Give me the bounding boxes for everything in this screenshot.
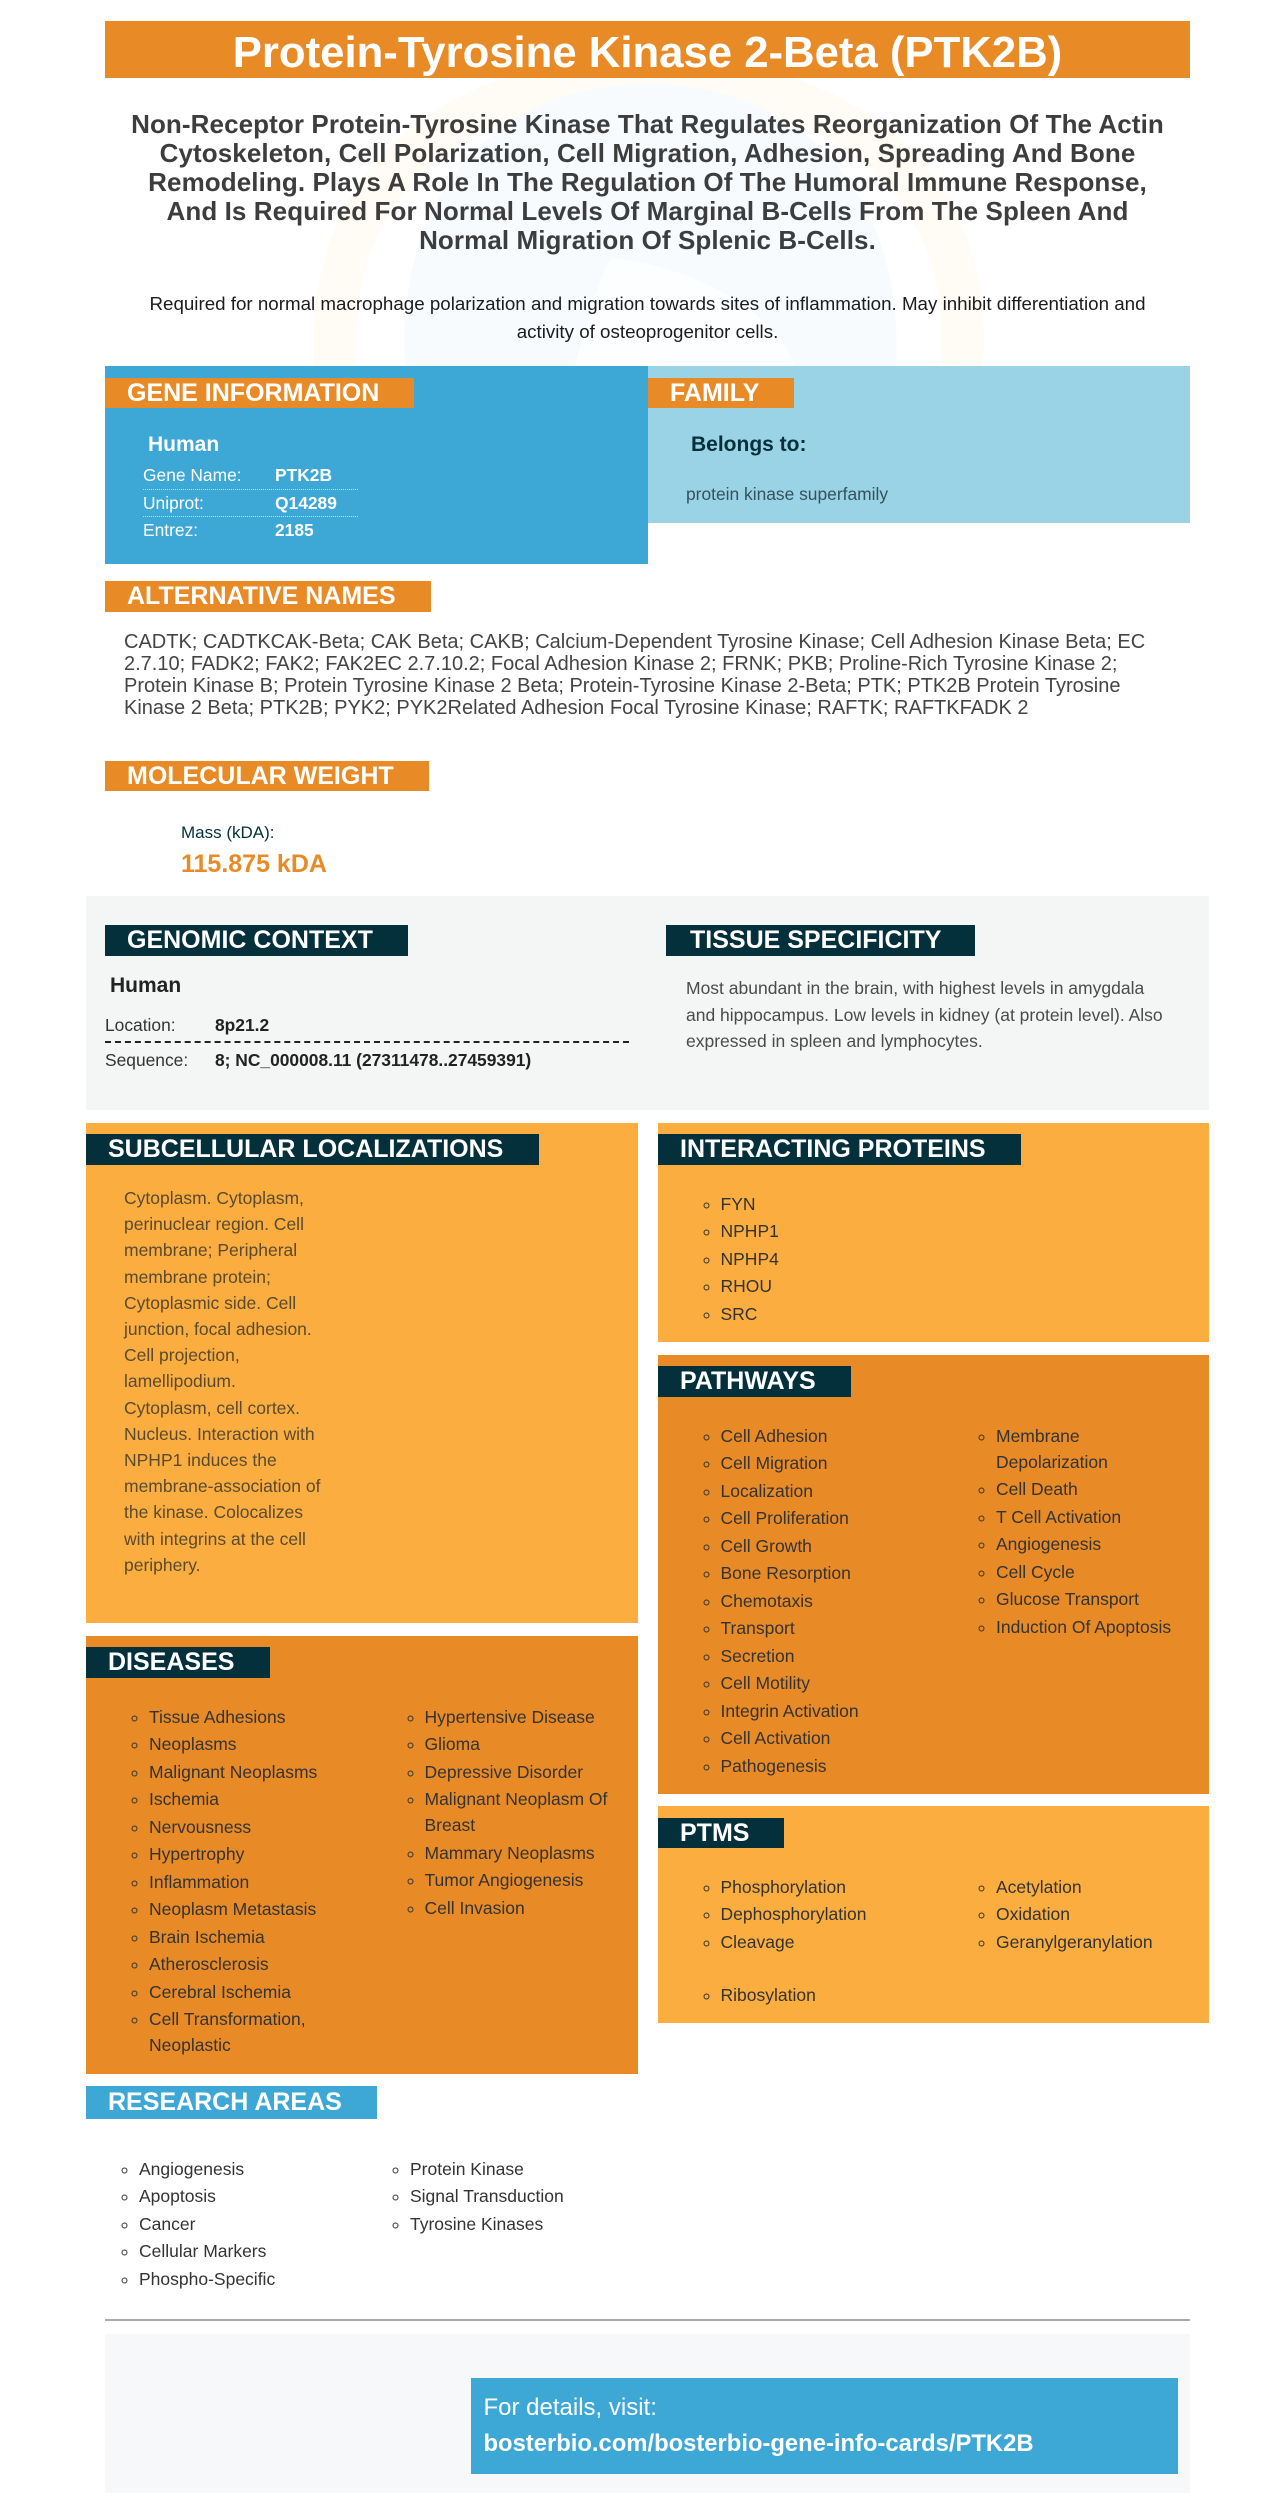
localization text: with integrins at the cell: [124, 1529, 306, 1549]
pathways list column 1: Pathogenesis: [720, 1756, 827, 1776]
diseases list column 2: Glioma: [424, 1734, 480, 1754]
sequence row: 8; NC_000008.11 (27311478..27459391): [215, 1050, 531, 1070]
localization text: membrane-association of: [124, 1476, 320, 1496]
description paragraph: [149, 293, 1146, 342]
summary heading: [131, 109, 1164, 255]
uniprot row: Q14289: [275, 493, 337, 513]
diseases list column 1: Cerebral Ischemia: [149, 1982, 291, 2002]
location row: Location:: [105, 1015, 176, 1035]
location row: 8p21.2: [215, 1015, 269, 1035]
heading: family: FAMILY: [670, 379, 759, 407]
mass label: Mass (kDA):: [181, 823, 274, 842]
ptms list column 2: Oxidation: [996, 1904, 1070, 1924]
heading: diseases: DISEASES: [108, 1648, 234, 1676]
interacting proteins list: RHOU: [720, 1276, 772, 1296]
tissue specificity text: expressed in spleen and lymphocytes.: [686, 1031, 983, 1051]
description paragraph: Required for normal macrophage polarization and migration towards sites of inflammation. May inhibit differentiation and: [149, 293, 1146, 314]
pathways list column 1: Bone Resorption: [720, 1563, 851, 1583]
summary heading: Non-Receptor Protein-Tyrosine Kinase That Regulates Reorganization Of The Actin: [131, 109, 1164, 139]
interacting proteins list: SRC: [720, 1304, 757, 1324]
call to action box: [471, 2378, 1178, 2474]
heading: ptms: PTMS: [680, 1819, 749, 1847]
panel: subcellular localizations: [86, 1123, 638, 1623]
summary heading: Remodeling. Plays A Role In The Regulation Of The Humoral Immune Response,: [148, 167, 1147, 197]
tissue specificity text: [686, 978, 1163, 1051]
panel: family: [648, 366, 1190, 523]
heading: diseases: [86, 1647, 270, 1678]
pathways list column 1: Secretion: [720, 1646, 794, 1666]
pathways list column 2: T Cell Activation: [996, 1507, 1121, 1527]
pathways list column 2: Cell Cycle: [996, 1562, 1075, 1582]
heading: subcellular localizations: SUBCELLULAR LOCALIZATIONS: [108, 1135, 503, 1163]
gene name row: [143, 463, 358, 490]
tissue specificity text: and hippocampus. Low levels in kidney (at protein level). Also: [686, 1004, 1163, 1024]
heading: interacting proteins: INTERACTING PROTEINS: [680, 1135, 986, 1163]
alternative names text: Kinase 2 Beta; PTK2B; PYK2; PYK2Related Adhesion Focal Tyrosine Kinase; RAFTK; RAFTKFADK 2: [124, 697, 1029, 719]
localization text: Cytoplasmic side. Cell: [124, 1293, 296, 1313]
ptms list column 2: Geranylgeranylation: [996, 1932, 1153, 1952]
ptms list column 1: Ribosylation: [720, 1985, 816, 2005]
diseases list column 1: [132, 1706, 317, 2055]
pathways list column 1: Integrin Activation: [720, 1700, 859, 1720]
localization text: membrane protein;: [124, 1267, 271, 1287]
interacting proteins list: FYN: [720, 1194, 756, 1214]
pathways list column 1: Localization: [720, 1480, 813, 1500]
tissue specificity text: Most abundant in the brain, with highest levels in amygdala: [686, 978, 1144, 998]
research areas list column 1: Apoptosis: [139, 2186, 216, 2206]
ptms list column 1: Phosphorylation: [720, 1876, 846, 1896]
diseases list column 2: Tumor Angiogenesis: [424, 1870, 583, 1890]
pathways list column 1: Cell Motility: [720, 1673, 810, 1693]
heading: research areas: [86, 2086, 377, 2119]
uniprot row: Uniprot:: [143, 493, 204, 513]
research areas list column 2: Tyrosine Kinases: [410, 2214, 543, 2234]
pathways list column 2: [978, 1426, 1171, 1637]
localization text: [124, 1188, 320, 1575]
pathways list column 1: Cell Proliferation: [720, 1508, 849, 1528]
research areas list column 2: [392, 2158, 564, 2234]
title banner: [105, 21, 1190, 78]
pathways list column 1: Chemotaxis: [720, 1590, 813, 1610]
localization text: perinuclear region. Cell: [124, 1214, 304, 1234]
diseases list column 1: Inflammation: [149, 1872, 249, 1892]
pathways list column 2: Depolarization: [996, 1452, 1108, 1472]
diseases list column 1: Neoplastic: [149, 2035, 231, 2055]
localization text: membrane; Peripheral: [124, 1240, 297, 1260]
pathways list column 1: Cell Activation: [720, 1728, 830, 1748]
entrez row: 2185: [275, 520, 314, 540]
link text: bosterbio.com/bosterbio-gene-info-cards/PTK2B: [484, 2430, 1034, 2457]
interacting proteins list: [704, 1194, 779, 1324]
heading: gene information: GENE INFORMATION: [127, 379, 379, 407]
heading: genomic context: GENOMIC CONTEXT: [127, 926, 373, 954]
localization text: the kinase. Colocalizes: [124, 1502, 303, 1522]
diseases list column 1: Cell Transformation,: [149, 2009, 306, 2029]
ptms list column 1: Dephosphorylation: [720, 1904, 866, 1924]
pathways list column 1: [704, 1426, 859, 1776]
diseases list column 1: Ischemia: [149, 1789, 219, 1809]
ptms list column 1: [704, 1876, 866, 2005]
localization text: Cytoplasm. Cytoplasm,: [124, 1188, 304, 1208]
heading: alternative names: ALTERNATIVE NAMES: [127, 582, 396, 610]
research areas list column 1: Angiogenesis: [139, 2158, 244, 2178]
footer panel: [105, 2334, 1190, 2493]
background watermark logo: [314, 78, 984, 366]
heading: pathways: [658, 1366, 851, 1397]
alternative names text: Protein Kinase B; Protein Tyrosine Kinase 2 Beta; Protein-Tyrosine Kinase 2-Beta; PTK; PTK2B Protein Tyrosine: [124, 675, 1120, 697]
location row: [105, 1013, 629, 1043]
diseases list column 2: Cell Invasion: [424, 1898, 525, 1918]
summary heading: And Is Required For Normal Levels Of Marginal B-Cells From The Spleen And: [166, 196, 1128, 226]
diseases list column 1: Tissue Adhesions: [149, 1706, 286, 1726]
localization text: Cytoplasm, cell cortex.: [124, 1398, 300, 1418]
ptms list column 2: Acetylation: [996, 1876, 1082, 1896]
alternative names text: [124, 631, 1145, 719]
diseases list column 1: Brain Ischemia: [149, 1926, 265, 1946]
molecular weight value: [181, 823, 327, 878]
panel: interacting proteins: [658, 1123, 1209, 1342]
panel: pathways: [658, 1355, 1209, 1794]
pathways list column 2: Angiogenesis: [996, 1534, 1101, 1554]
localization text: junction, focal adhesion.: [124, 1319, 312, 1339]
gene name row: PTK2B: [275, 465, 332, 485]
pathways list column 2: Glucose Transport: [996, 1589, 1139, 1609]
ptms list column 2: [978, 1876, 1153, 1952]
pathways list column 1: Transport: [720, 1618, 795, 1638]
panel: ptms: [658, 1806, 1209, 2023]
sequence row: Sequence:: [105, 1050, 188, 1070]
diseases list column 2: Mammary Neoplasms: [424, 1843, 595, 1863]
diseases list column 2: Depressive Disorder: [424, 1762, 583, 1782]
uniprot row: [143, 490, 358, 517]
diseases list column 1: Neoplasms: [149, 1734, 237, 1754]
diseases list column 2: Hypertensive Disease: [424, 1706, 595, 1726]
research areas list column 1: [122, 2158, 275, 2288]
mass value: 115.875 kDA: [181, 850, 327, 878]
research areas list column 2: Signal Transduction: [410, 2186, 564, 2206]
panel: genomic context and tissue specificity: [86, 896, 1209, 1110]
diseases list column 2: [408, 1706, 608, 1918]
visit label: For details, visit:: [484, 2394, 657, 2421]
pathways list column 1: Cell Adhesion: [720, 1426, 828, 1446]
summary heading: Cytoskeleton, Cell Polarization, Cell Migration, Adhesion, Spreading And Bone: [160, 138, 1135, 168]
alternative names text: CADTK; CADTKCAK-Beta; CAK Beta; CAKB; Calcium-Dependent Tyrosine Kinase; Cell Adhesion Kinase Beta; EC: [124, 631, 1145, 653]
title banner: Protein-Tyrosine Kinase 2-Beta (PTK2B): [233, 28, 1062, 77]
diseases list column 1: Atherosclerosis: [149, 1954, 269, 1974]
panel: diseases: [86, 1636, 638, 2074]
pathways list column 1: Cell Growth: [720, 1536, 812, 1556]
description paragraph: activity of osteoprogenitor cells.: [517, 321, 778, 342]
localization text: Cell projection,: [124, 1345, 240, 1365]
localization text: lamellipodium.: [124, 1371, 236, 1391]
alternative names text: 2.7.10; FADK2; FAK2; FAK2EC 2.7.10.2; Focal Adhesion Kinase 2; FRNK; PKB; Proline-Rich Tyrosine Kinase 2;: [124, 653, 1117, 675]
research areas list column 2: Protein Kinase: [410, 2158, 524, 2178]
research areas list column 1: Cellular Markers: [139, 2241, 266, 2261]
heading: tissue specificity: TISSUE SPECIFICITY: [690, 926, 941, 954]
panel: gene information: [105, 366, 648, 564]
diseases list column 2: Breast: [424, 1815, 475, 1835]
pathways list column 2: Cell Death: [996, 1479, 1078, 1499]
pathways list column 2: Membrane: [996, 1426, 1080, 1446]
research areas list column 1: Phospho-Specific: [139, 2268, 275, 2288]
entrez row: Entrez:: [143, 520, 198, 540]
species label: Human: [148, 433, 219, 456]
entrez row: [143, 520, 314, 540]
localization text: NPHP1 induces the: [124, 1450, 277, 1470]
heading: ptms: [658, 1818, 784, 1848]
interacting proteins list: NPHP4: [720, 1248, 779, 1268]
species label: Human: [110, 974, 181, 997]
heading: family: [648, 378, 794, 408]
interacting proteins list: NPHP1: [720, 1221, 779, 1241]
diseases list column 1: Nervousness: [149, 1816, 251, 1836]
diseases list column 1: Malignant Neoplasms: [149, 1762, 317, 1782]
summary heading: Normal Migration Of Splenic B-Cells.: [419, 225, 876, 255]
research areas list column 1: Cancer: [139, 2214, 195, 2234]
pathways list column 1: Cell Migration: [720, 1453, 827, 1473]
diseases list column 1: Hypertrophy: [149, 1844, 244, 1864]
localization text: periphery.: [124, 1555, 201, 1575]
localization text: Nucleus. Interaction with: [124, 1424, 315, 1444]
heading: molecular weight: MOLECULAR WEIGHT: [127, 762, 394, 790]
heading: research areas: RESEARCH AREAS: [108, 2088, 342, 2116]
pathways list column 2: Induction Of Apoptosis: [996, 1617, 1171, 1637]
diseases list column 2: Malignant Neoplasm Of: [424, 1789, 607, 1809]
family value: protein kinase superfamily: [686, 484, 888, 504]
diseases list column 1: Neoplasm Metastasis: [149, 1899, 316, 1919]
ptms list column 1: Cleavage: [720, 1932, 794, 1952]
belongs to label: Belongs to:: [691, 433, 806, 456]
gene name row: Gene Name:: [143, 465, 242, 485]
heading: pathways: PATHWAYS: [680, 1367, 816, 1395]
